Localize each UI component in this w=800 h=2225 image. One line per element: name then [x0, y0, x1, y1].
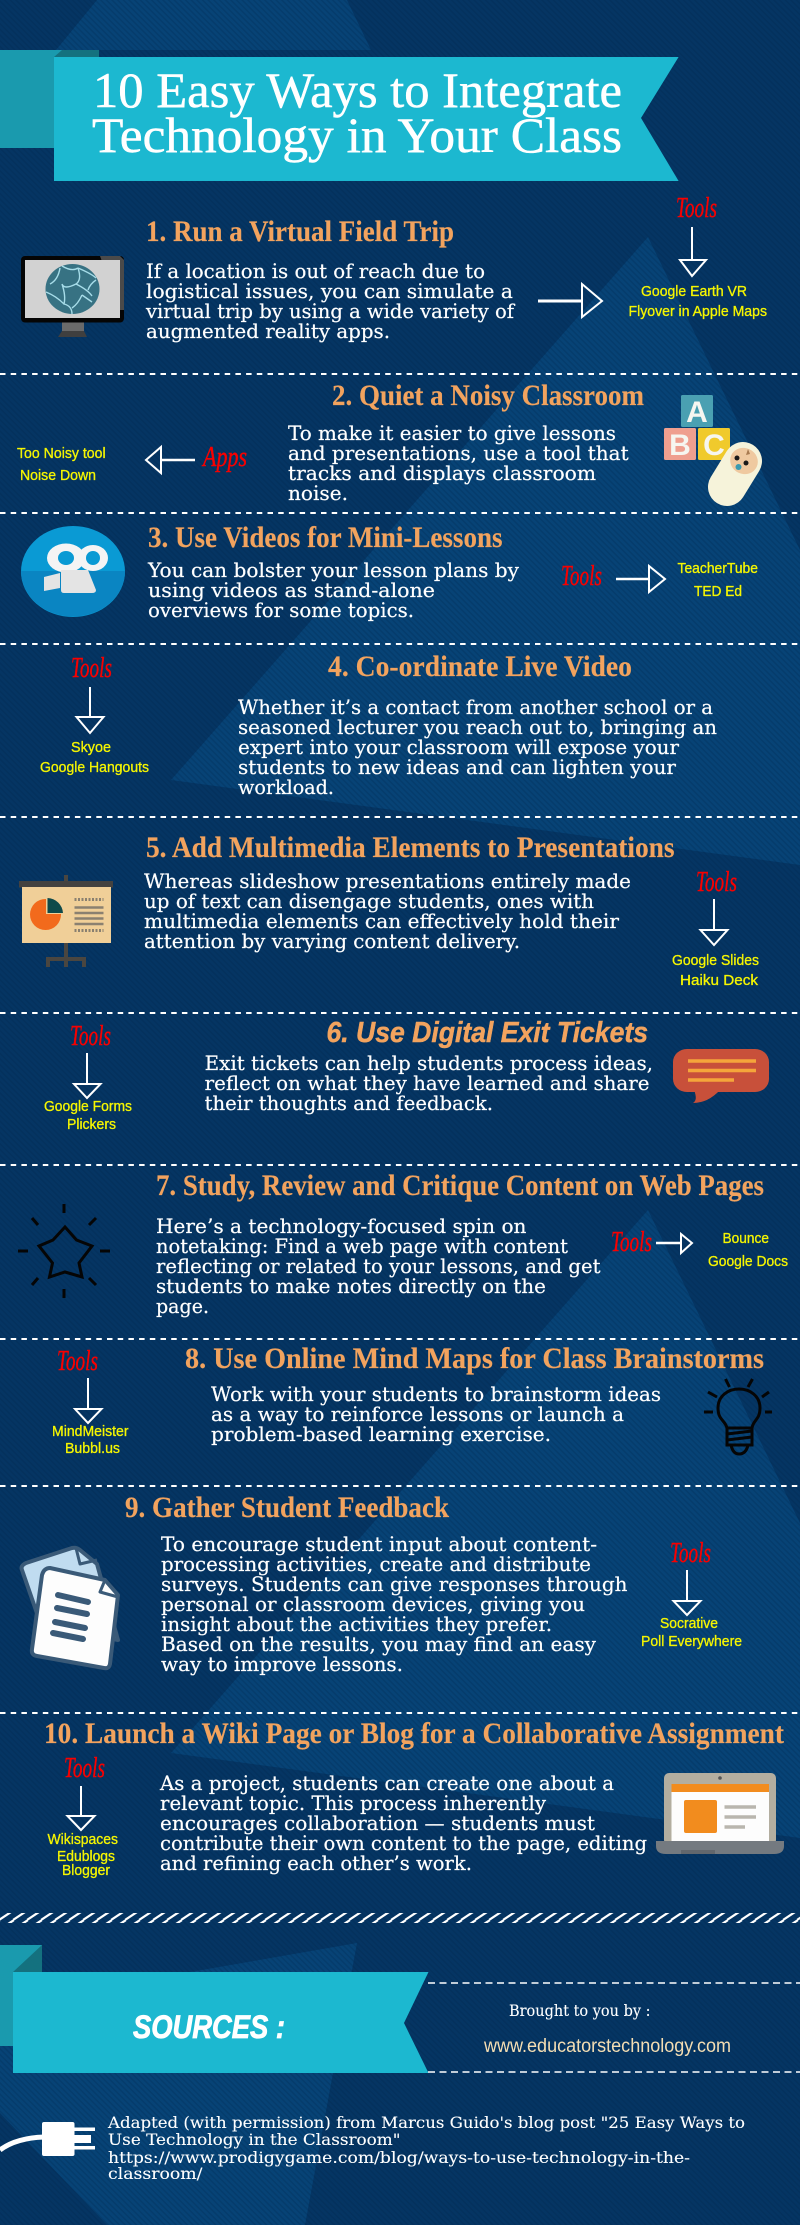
body text: as a way to reinforce lessons or launch a	[211, 1402, 624, 1426]
body text: tracks and displays classroom	[288, 461, 596, 485]
body text: processing activities, create and distribute	[161, 1552, 591, 1576]
body text: Whereas slideshow presentations entirely made	[144, 869, 631, 893]
heading: sources: SOURCES :	[133, 2009, 285, 2045]
panel: section 4	[40, 650, 717, 799]
body text	[205, 1051, 653, 1115]
icon: presentation board	[19, 875, 113, 967]
body text: If a location is out of reach due to	[146, 259, 485, 283]
title: 10 Easy Ways to Integrate	[93, 62, 622, 118]
title banner	[0, 50, 679, 181]
body text: page.	[156, 1294, 209, 1318]
source text: Adapted (with permission) from Marcus Guido's blog post "25 Easy Ways to	[107, 2113, 745, 2132]
body text: workload.	[238, 775, 334, 799]
body text	[145, 259, 516, 343]
arrow: down	[700, 899, 728, 945]
tools list	[628, 284, 767, 320]
body text	[211, 1382, 661, 1446]
body text	[147, 558, 520, 622]
tools list: Google Docs	[708, 1254, 788, 1270]
body text: To encourage student input about content-	[161, 1532, 597, 1556]
body text: Here’s a technology-focused spin on	[156, 1214, 527, 1238]
body text: contribute their own content to the page, editing	[160, 1831, 647, 1855]
body text: surveys. Students can give responses through	[161, 1572, 628, 1596]
body text	[288, 421, 629, 505]
tools list: Socrative	[660, 1616, 718, 1632]
panel: section 10	[44, 1717, 784, 1879]
body text: Based on the results, you may find an easy	[161, 1632, 597, 1656]
label: tools: Tools	[676, 193, 717, 224]
tools list	[672, 953, 759, 989]
body text: way to improve lessons.	[161, 1652, 403, 1676]
tools list: TED Ed	[694, 584, 742, 600]
tools list: Noise Down	[20, 468, 96, 484]
title	[92, 62, 622, 163]
tools list: Wikispaces	[48, 1832, 118, 1848]
tools list: Haiku Deck	[680, 973, 759, 989]
body text: attention by varying content delivery.	[144, 929, 520, 953]
source text: https://www.prodigygame.com/blog/ways-to-use-technology-in-the-	[108, 2148, 690, 2167]
panel: section 1	[21, 193, 767, 343]
body text: and refining each other’s work.	[160, 1851, 472, 1875]
body text	[159, 1771, 647, 1875]
label: tools: Tools	[611, 1227, 652, 1258]
tools list: Poll Everywhere	[641, 1634, 742, 1650]
body text	[144, 869, 631, 953]
panel: section 8	[52, 1342, 772, 1457]
body text: You can bolster your lesson plans by	[147, 558, 520, 582]
heading: 4. Co-ordinate Live Video	[328, 650, 632, 683]
icon: alphabet blocks and baby: B	[669, 429, 691, 462]
body text: Whether it’s a contact from another school or a	[238, 695, 713, 719]
icon: plug	[0, 2122, 95, 2156]
tools list: Skyoe	[71, 740, 111, 756]
tools list: Too Noisy tool	[17, 446, 106, 462]
icon: video camera	[21, 526, 125, 617]
body text: students to make notes directly on the	[156, 1274, 546, 1298]
body text: Work with your students to brainstorm ideas	[211, 1382, 661, 1406]
label: tools: Tools	[57, 1346, 98, 1377]
icon: monitor with globe	[21, 256, 124, 337]
body text	[156, 1214, 600, 1318]
icon: laptop	[656, 1773, 784, 1854]
icon: speech bubble	[673, 1049, 769, 1103]
arrow: right	[616, 566, 665, 592]
tools list	[17, 446, 106, 484]
source text: classroom/	[108, 2164, 203, 2183]
label: tools: Tools	[64, 1753, 105, 1784]
credit lines: Brought to you by :	[509, 2001, 650, 2020]
tools list	[52, 1424, 129, 1457]
tools list	[40, 740, 149, 776]
tools list: Bubbl.us	[65, 1441, 120, 1457]
tools list: Google Forms	[44, 1099, 132, 1115]
dashed dividers	[0, 374, 800, 1713]
tools list	[44, 1099, 132, 1133]
body text: personal or classroom devices, giving you	[161, 1592, 585, 1616]
body text: their thoughts and feedback.	[205, 1091, 493, 1115]
credit lines	[428, 1983, 800, 2072]
label: tools: Tools	[71, 653, 112, 684]
body text: seasoned lecturer you reach out to, bringing an	[238, 715, 717, 739]
body text: expert into your classroom will expose your	[238, 735, 679, 759]
tools list: Flyover in Apple Maps	[628, 304, 767, 320]
tools list	[678, 561, 758, 600]
label: tools: Tools	[670, 1538, 711, 1569]
body text	[238, 695, 717, 799]
title: Technology in Your Class	[92, 107, 622, 163]
body text: reflect on what they have learned and share	[205, 1071, 650, 1095]
body text: augmented reality apps.	[146, 319, 390, 343]
body text: notetaking: Find a web page with content	[156, 1234, 568, 1258]
panel: section 2	[17, 379, 762, 505]
panel: section 7	[18, 1169, 788, 1318]
heading: 8. Use Online Mind Maps for Class Brainstorms	[185, 1342, 764, 1375]
tools list	[708, 1231, 788, 1270]
arrow: right	[538, 284, 602, 317]
tools list: Google Earth VR	[641, 284, 747, 300]
icon: star with rays	[18, 1204, 110, 1298]
body text: using videos as stand-alone	[148, 578, 435, 602]
panel: section 3	[21, 521, 758, 622]
label: tools: Tools	[561, 561, 602, 592]
body text: relevant topic. This process inherently	[160, 1791, 547, 1815]
tools list: Google Hangouts	[40, 760, 149, 776]
panel: section 5	[19, 831, 759, 989]
body text: encourages collaboration — students must	[160, 1811, 595, 1835]
arrow: down	[674, 1570, 700, 1615]
panel: section 9	[22, 1491, 742, 1676]
body text: problem-based learning exercise.	[211, 1422, 551, 1446]
heading: 5. Add Multimedia Elements to Presentations	[146, 831, 674, 864]
heading: 3. Use Videos for Mini-Lessons	[148, 521, 502, 554]
body text: insight about the activities they prefer.	[161, 1612, 552, 1636]
source text: Use Technology in the Classroom"	[108, 2130, 400, 2149]
credit lines: www.educatorstechnology.com	[483, 2036, 731, 2057]
heading: 6. Use Digital Exit Tickets	[326, 1017, 648, 1049]
arrow: down	[76, 687, 104, 733]
body text: students to new ideas and can lighten your	[238, 755, 676, 779]
tools list: Blogger	[62, 1863, 110, 1879]
label: apps: Apps	[201, 442, 247, 473]
body text: logistical issues, you can simulate a	[146, 279, 513, 303]
heading: 9. Gather Student Feedback	[125, 1491, 449, 1524]
heading: 2. Quiet a Noisy Classroom	[332, 379, 644, 412]
heading: 1. Run a Virtual Field Trip	[146, 215, 454, 248]
body text: multimedia elements can effectively hold their	[144, 909, 619, 933]
arrow: down	[74, 1053, 100, 1098]
body text: reflecting or related to your lessons, and get	[156, 1254, 600, 1278]
icon: light bulb	[704, 1379, 772, 1454]
hatched divider	[0, 1913, 800, 1923]
tools list	[641, 1616, 742, 1650]
tools list: TeacherTube	[678, 561, 758, 577]
arrow: left	[146, 447, 195, 473]
tools list	[48, 1832, 118, 1879]
icon: alphabet blocks and baby	[664, 395, 762, 487]
tools list: Plickers	[67, 1117, 116, 1133]
tools list: Bounce	[722, 1231, 769, 1247]
body text: To make it easier to give lessons	[288, 421, 616, 445]
icon: alphabet blocks and baby: C	[703, 429, 725, 462]
arrow: down	[68, 1786, 94, 1830]
body text	[161, 1532, 628, 1676]
body text: up of text can disengage students, ones with	[144, 889, 594, 913]
tools list: MindMeister	[52, 1424, 129, 1440]
tools list: Edublogs	[57, 1849, 115, 1865]
sources ribbon	[0, 1945, 428, 2073]
label: tools: Tools	[696, 867, 737, 898]
panel: sources	[0, 1945, 800, 2183]
arrow: right	[656, 1234, 692, 1253]
body text: noise.	[288, 481, 348, 505]
body text: Exit tickets can help students process ideas,	[205, 1051, 653, 1075]
arrow: down	[680, 227, 706, 276]
source text	[107, 2113, 745, 2183]
body text: As a project, students can create one about a	[159, 1771, 614, 1795]
panel: section 6	[44, 1017, 769, 1133]
body text: overviews for some topics.	[148, 598, 414, 622]
icon: alphabet blocks and baby: A	[686, 396, 708, 429]
arrow: down	[75, 1378, 102, 1423]
body text: virtual trip by using a wide variety of	[145, 299, 516, 323]
tools list: Google Slides	[672, 953, 759, 969]
body text: and presentations, use a tool that	[288, 441, 629, 465]
icon: documents	[22, 1548, 118, 1668]
label: tools: Tools	[70, 1021, 111, 1052]
